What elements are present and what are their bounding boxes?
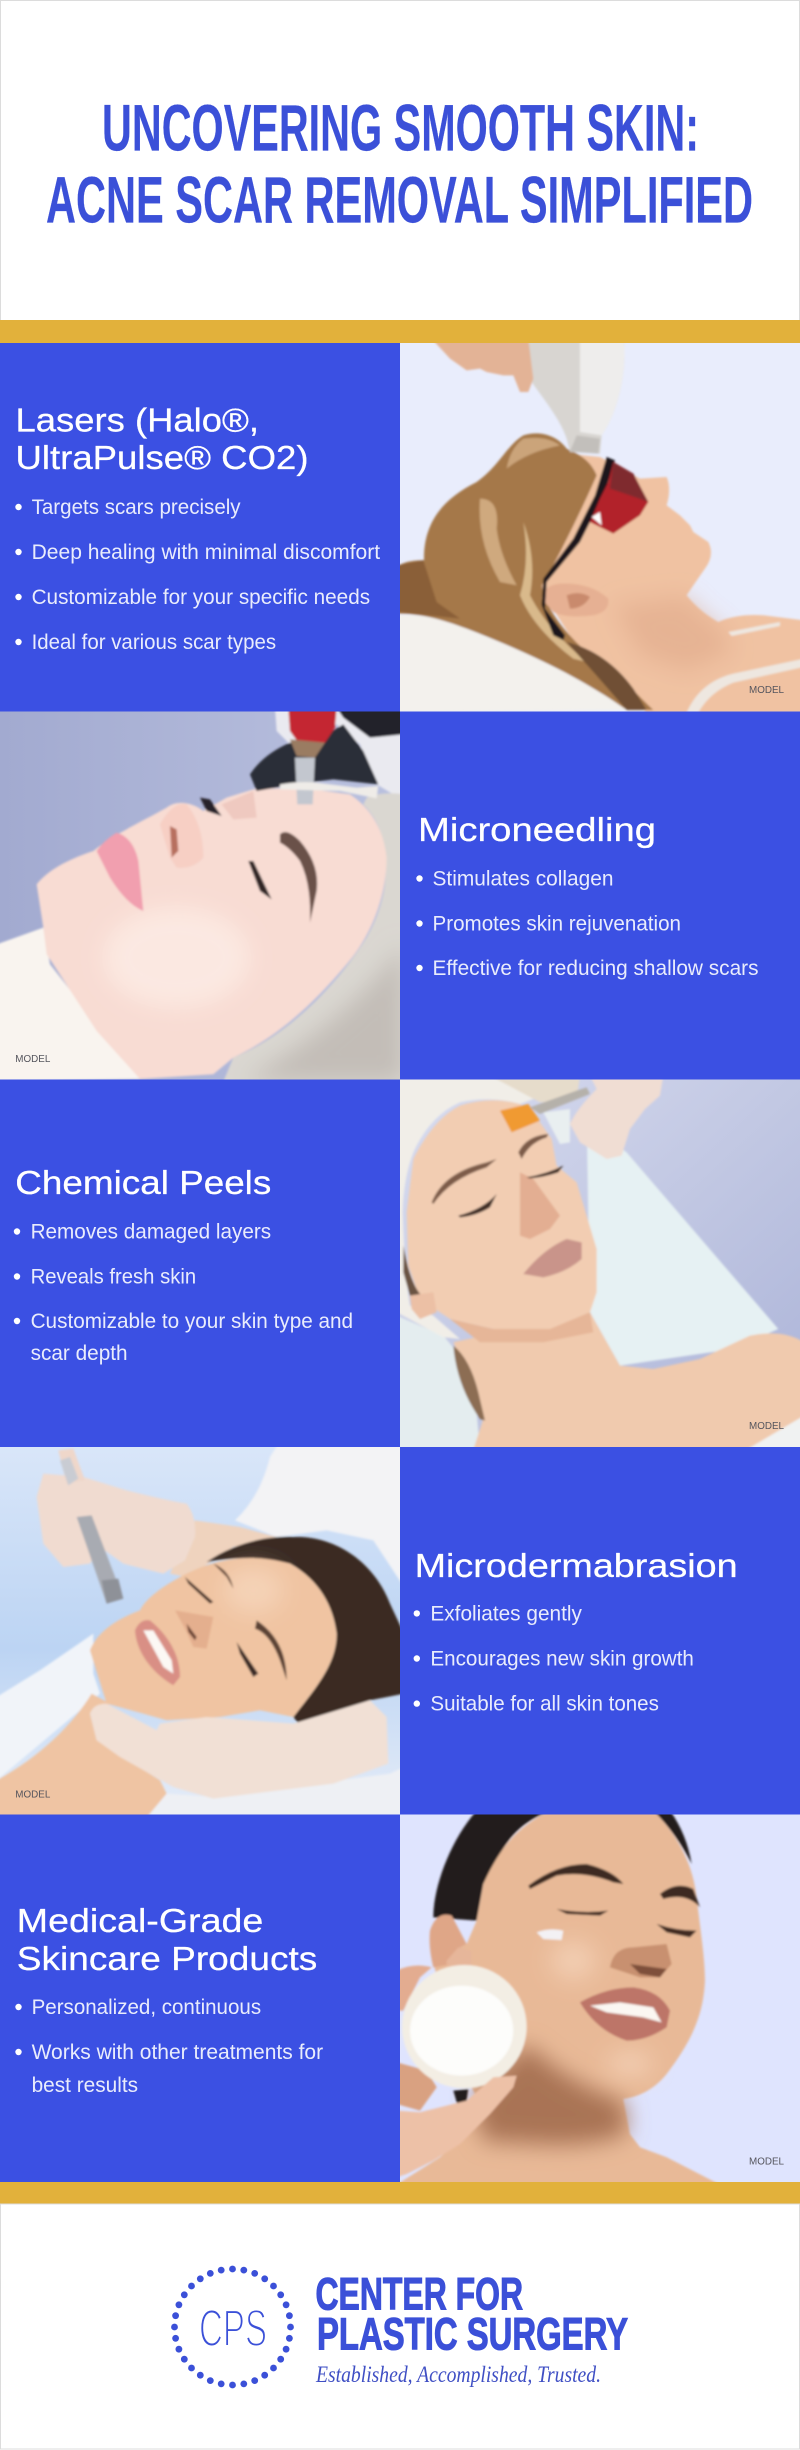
model label: MODEL (15, 1788, 50, 1800)
heading: lasers (16, 402, 308, 477)
bottom gold band (0, 2182, 800, 2204)
tagline: Established, Accomplished, Trusted. (315, 2362, 601, 2387)
logo wordmark (316, 2268, 628, 2359)
model label: MODEL (749, 684, 784, 696)
logo: CPS dotted circle (171, 2266, 294, 2388)
bullet list: chemical peels: Removes damaged layers (31, 1220, 271, 1244)
photo: laser treatment (397, 339, 800, 713)
bullet list: skincare products (15, 1996, 323, 2097)
panel: microdermabrasion (400, 1447, 800, 1814)
heading: skincare products (17, 1903, 317, 1978)
panel: lasers (0, 343, 400, 712)
logo: CPS dotted circle: CPS (199, 2300, 267, 2358)
bullet list: chemical peels: scar depth (31, 1342, 128, 1365)
bullet list: microdermabrasion (414, 1602, 694, 1716)
photo: microdermabrasion (0, 1444, 404, 1818)
bullet list: lasers: Ideal for various scar types (32, 631, 276, 654)
bullet list: skincare products: Personalized, continuous (32, 1996, 261, 2019)
bullet list: skincare products: best results (32, 2074, 138, 2097)
panel: chemical peels (0, 1080, 400, 1447)
bullet list: microneedling: Promotes skin rejuvenation (432, 912, 681, 936)
model label: MODEL (749, 1420, 784, 1432)
bullet list: skincare products: Works with other treatments for (32, 2041, 323, 2064)
bullet list: microneedling (416, 868, 758, 980)
photo: skincare cream (397, 1811, 800, 2185)
footer panel (0, 2204, 800, 2449)
bullet list: microdermabrasion: Encourages new skin growth (430, 1648, 694, 1670)
heading: microdermabrasion: Microdermabrasion (415, 1548, 738, 1585)
model label: MODEL (749, 2156, 784, 2168)
heading: chemical peels: Chemical Peels (15, 1165, 271, 1202)
bullet list: lasers: Deep healing with minimal discomfort (32, 541, 380, 564)
bullet list: microneedling: Effective for reducing shallow scars (432, 957, 758, 980)
heading: lasers: Lasers (Halo®, (16, 402, 259, 440)
bullet list: lasers: Customizable for your specific needs (32, 586, 370, 609)
logo wordmark: CENTER FOR (316, 2268, 523, 2319)
bullet list: chemical peels: Customizable to your skin type and (31, 1310, 353, 1333)
bullet list: chemical peels: Reveals fresh skin (31, 1266, 196, 1288)
bullet list: microdermabrasion: Exfoliates gently (430, 1602, 582, 1625)
bullet list: microdermabrasion: Suitable for all skin tones (430, 1693, 659, 1716)
heading: skincare products: Skincare Products (17, 1941, 317, 1978)
logo wordmark: PLASTIC SURGERY (317, 2308, 628, 2359)
panel: skincare products (0, 1814, 400, 2182)
photo: chemical peel (397, 1076, 800, 1450)
bullet list: lasers: Targets scars precisely (32, 496, 241, 519)
panel: microneedling (400, 712, 800, 1080)
heading: microneedling: Microneedling (418, 812, 656, 849)
model label: MODEL (15, 1053, 50, 1065)
photo: microneedling (0, 708, 404, 1082)
heading: lasers: UltraPulse® CO2) (16, 440, 308, 477)
bullet list: chemical peels (14, 1220, 353, 1365)
heading: skincare products: Medical-Grade (17, 1903, 263, 1940)
bullet list: microneedling: Stimulates collagen (432, 868, 614, 890)
bullet list: lasers (15, 496, 380, 654)
top gold band (0, 320, 800, 343)
title (46, 90, 753, 236)
header panel (0, 0, 800, 322)
